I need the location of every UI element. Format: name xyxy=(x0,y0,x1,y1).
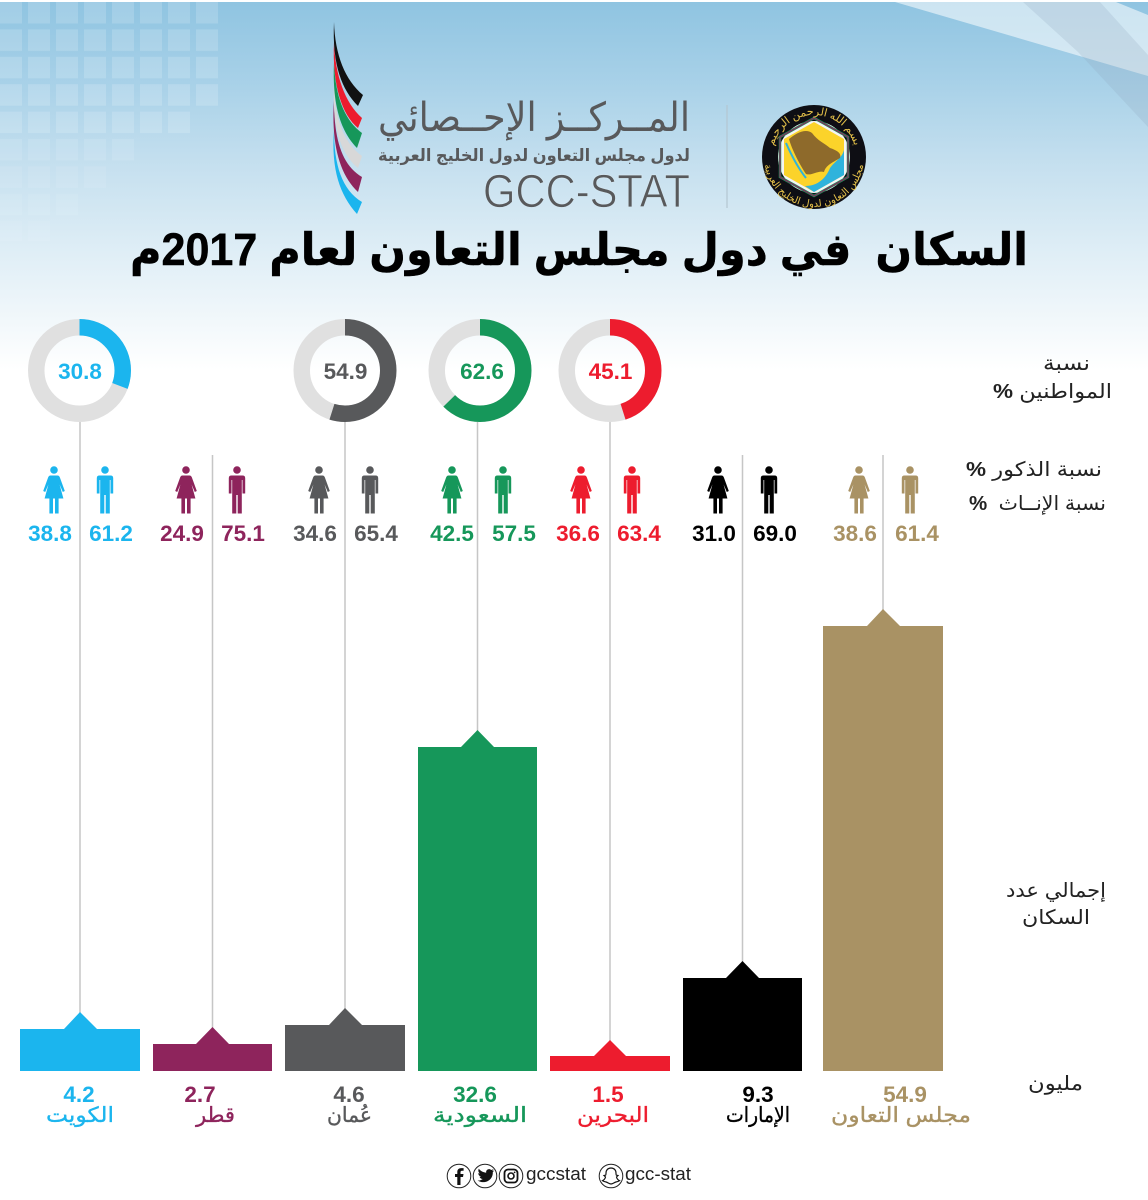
Oman label: عُمان xyxy=(327,1104,372,1127)
icon: Oman male xyxy=(362,466,378,514)
bar: Kuwait xyxy=(20,1012,140,1071)
column: Bahrain xyxy=(550,327,670,1127)
title: السكان في دول مجلس التعاون لعام 2017م xyxy=(130,224,1028,276)
column: Qatar xyxy=(153,466,272,1127)
donut: Saudi citizens: 62.6 xyxy=(460,359,504,384)
donut: Bahrain citizens xyxy=(567,327,653,414)
icon: GCC emblem: مجلس التعاون لدول الخليج العربية xyxy=(764,165,864,210)
connector lines xyxy=(80,422,883,1042)
Kuwait male share: 61.2 xyxy=(89,521,133,546)
icon: Qatar female xyxy=(175,466,197,514)
bar: Bahrain xyxy=(550,1040,670,1071)
logo: Arabic name: المــركــز الإحــصائي xyxy=(378,96,690,141)
column: UAE xyxy=(683,466,802,1127)
row label: female share: نسبة الإنــاث % xyxy=(969,493,1106,515)
bar: Saudi Arabia xyxy=(418,730,537,1071)
bar: Oman xyxy=(285,1008,405,1071)
Kuwait female share: 38.8 xyxy=(28,521,72,546)
UAE female share: 31.0 xyxy=(692,521,736,546)
bar: GCC xyxy=(823,609,943,1071)
GCC label: مجلس التعاون xyxy=(831,1104,971,1127)
bar: Qatar xyxy=(153,1027,272,1071)
icon: facebook xyxy=(447,1164,471,1188)
handle: gccstat: gccstat xyxy=(526,1164,586,1184)
Bahrain label: البحرين xyxy=(577,1104,649,1127)
row label: total population xyxy=(1006,880,1106,929)
donut: Kuwait citizens: 30.8 xyxy=(58,359,102,384)
Saudi male share: 57.5 xyxy=(492,521,536,546)
row label: citizens share xyxy=(993,353,1112,403)
row label: total population: إجمالي عدد xyxy=(1006,880,1106,903)
row label: million: مليون xyxy=(1028,1073,1083,1095)
icon: Qatar male xyxy=(229,466,245,514)
icon: Bahrain female xyxy=(570,466,592,514)
row label: total population: السكان xyxy=(1022,907,1090,929)
Saudi female share: 42.5 xyxy=(430,521,474,546)
UAE population: 9.3 xyxy=(742,1082,774,1107)
row label: citizens share: نسبة xyxy=(1043,353,1090,375)
icon: UAE female xyxy=(707,466,729,514)
Saudi label: السعودية xyxy=(433,1104,527,1127)
Qatar female share: 24.9 xyxy=(160,521,204,546)
handle: gcc-stat: gcc-stat xyxy=(625,1164,691,1184)
icon: Saudi female xyxy=(441,466,463,514)
column: GCC total xyxy=(823,466,971,1127)
column: Saudi Arabia xyxy=(418,327,537,1127)
Qatar label: قطر xyxy=(195,1104,235,1127)
icon: snapchat xyxy=(599,1164,623,1188)
Kuwait population: 4.2 xyxy=(63,1082,95,1107)
UAE label: الإمارات xyxy=(726,1104,790,1127)
donut: Kuwait citizens xyxy=(36,327,123,414)
donut: Saudi citizens xyxy=(437,327,523,414)
logo: GCC-STAT wordmark: GCC-STAT xyxy=(483,165,690,217)
icon: GCC female xyxy=(848,466,870,514)
donut: Bahrain citizens: 45.1 xyxy=(589,359,632,384)
icon: instagram xyxy=(499,1164,523,1188)
row label: male share: نسبة الذكور % xyxy=(966,459,1102,481)
Qatar male share: 75.1 xyxy=(221,521,265,546)
Bahrain female share: 36.6 xyxy=(556,521,600,546)
logo: GCC-STAT ribbon xyxy=(333,22,363,214)
column: Oman xyxy=(285,327,405,1127)
row label: citizens share: المواطنين % xyxy=(993,381,1112,403)
Oman population: 4.6 xyxy=(333,1082,365,1107)
UAE male share: 69.0 xyxy=(753,521,797,546)
icon: twitter xyxy=(473,1164,497,1188)
Oman male share: 65.4 xyxy=(354,521,398,546)
icon: Kuwait female xyxy=(43,466,65,514)
icon: Bahrain male xyxy=(624,466,640,514)
Bahrain population: 1.5 xyxy=(592,1082,624,1107)
icon: Saudi male xyxy=(495,466,511,514)
icon: Kuwait male xyxy=(97,466,113,514)
icon: GCC male xyxy=(902,466,918,514)
icon: GCC emblem xyxy=(762,105,866,210)
icon: Oman female xyxy=(308,466,330,514)
donut: Oman citizens xyxy=(302,327,388,414)
Saudi population: 32.6 xyxy=(453,1082,497,1107)
icon: GCC emblem: بسم الله الرحمن الرحيم xyxy=(771,107,858,146)
logo: Arabic subtitle: لدول مجلس التعاون لدول الخليج العربية xyxy=(378,146,690,166)
GCC female share: 38.6 xyxy=(833,521,877,546)
footer social handles xyxy=(447,1164,691,1188)
Qatar population: 2.7 xyxy=(184,1082,216,1107)
column: Kuwait xyxy=(20,327,140,1127)
Kuwait label: الكويت xyxy=(46,1104,114,1127)
donut: Oman citizens: 54.9 xyxy=(324,359,367,384)
GCC population: 54.9 xyxy=(883,1082,927,1107)
Oman female share: 34.6 xyxy=(293,521,337,546)
icon: UAE male xyxy=(761,466,777,514)
bar: UAE xyxy=(683,961,802,1071)
GCC male share: 61.4 xyxy=(895,521,939,546)
Bahrain male share: 63.4 xyxy=(617,521,661,546)
